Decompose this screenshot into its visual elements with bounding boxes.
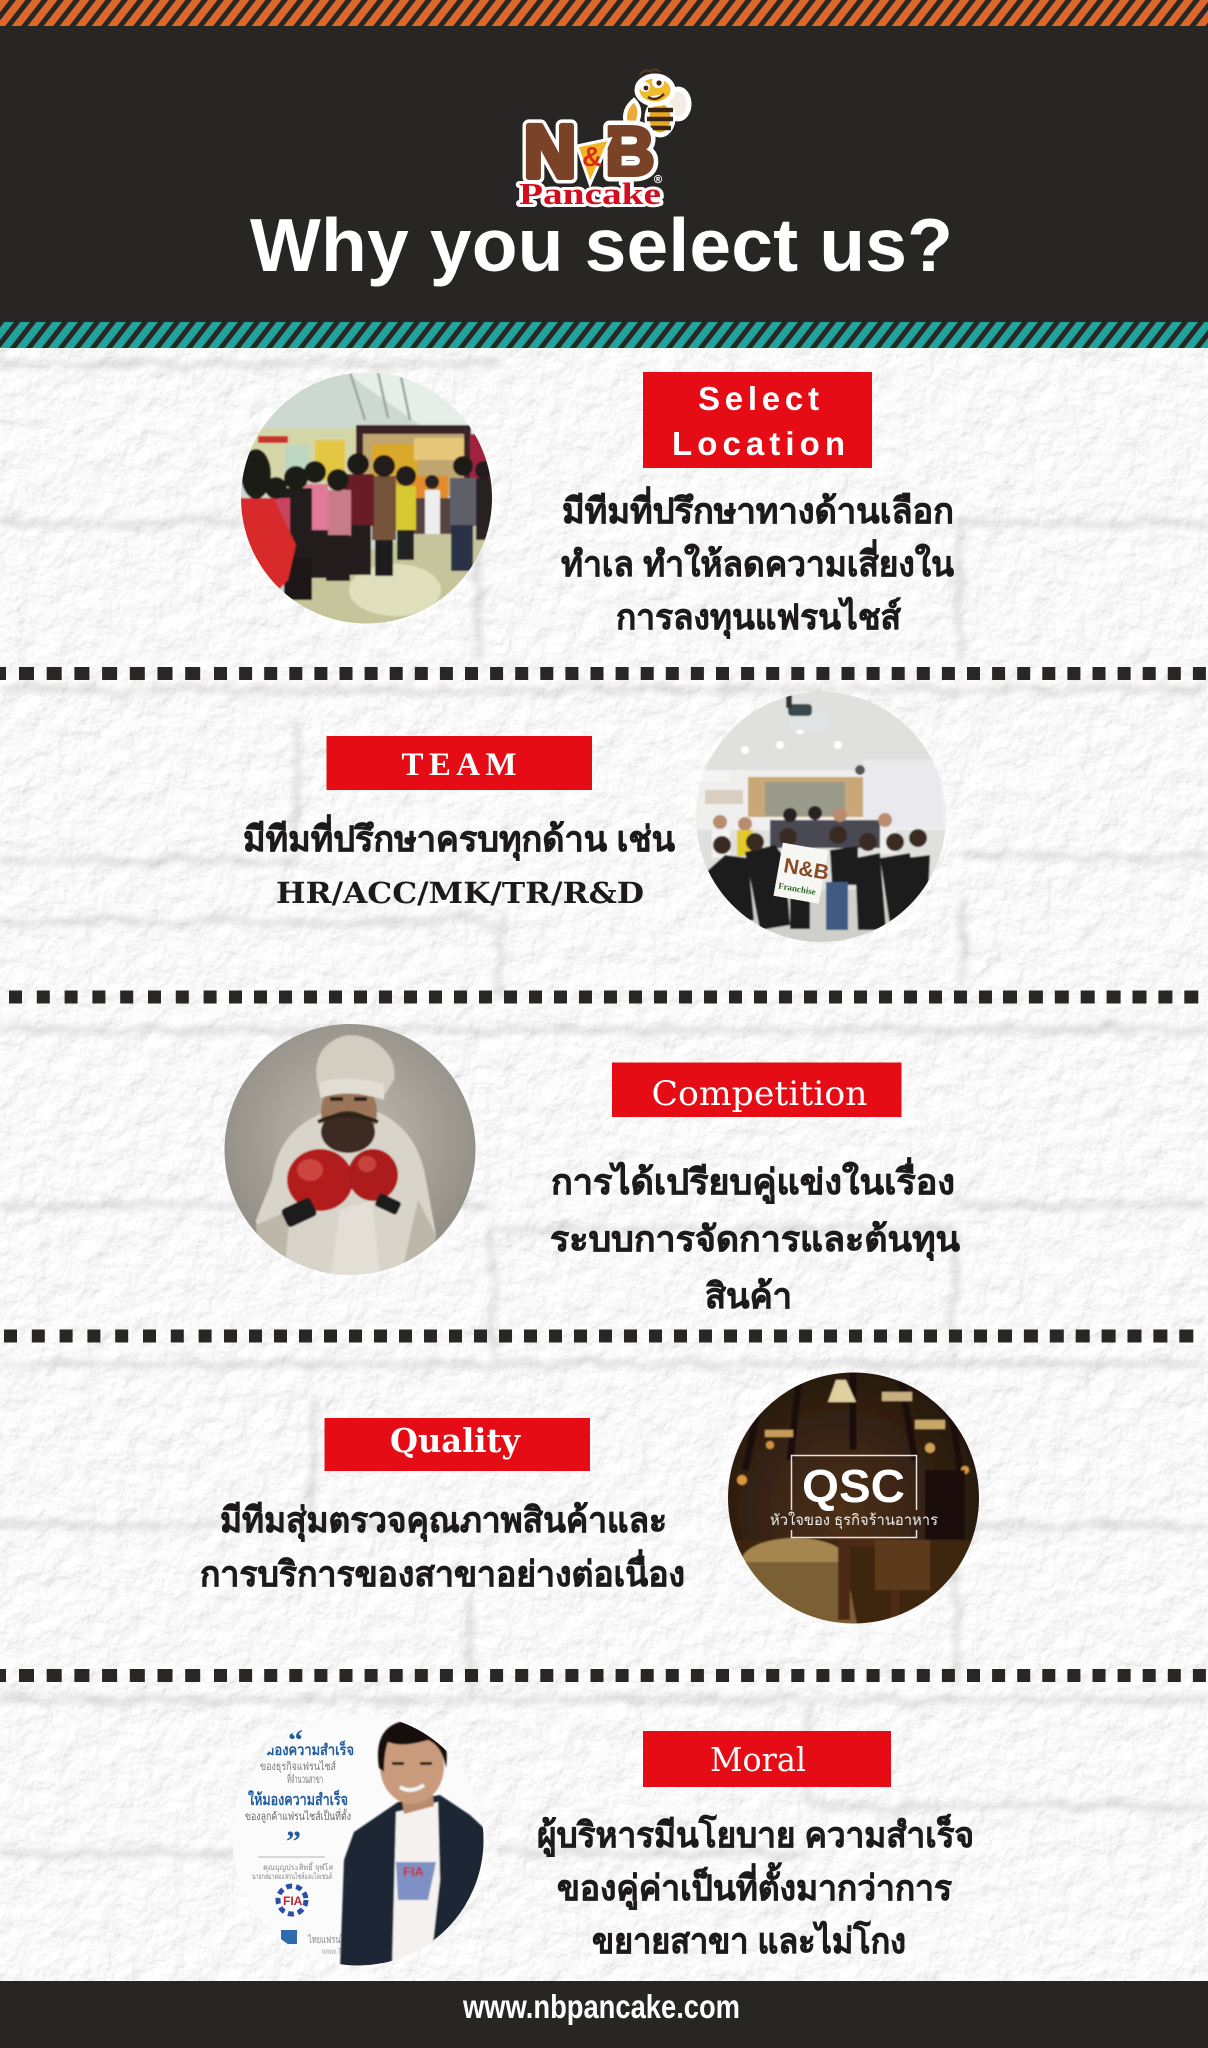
photo: executive portrait with quote: ไทยแฟรนไชส์เซ็นเตอร์ | รวมธุรกิจไทย bbox=[307, 1932, 433, 1946]
text: moral description: ของคู่ค่าเป็นที่ตั้งมากว่าการ bbox=[557, 1862, 952, 1910]
photo: executive portrait with quote bbox=[230, 1712, 486, 1970]
heading: select location: Select bbox=[698, 380, 819, 417]
quote text in the portrait: ” bbox=[286, 1825, 301, 1858]
franchise sign: N&B bbox=[782, 854, 831, 885]
text: quality description: มีทีมสุ่มตรวจคุณภาพสินค้าและ bbox=[220, 1501, 667, 1542]
heading: quality bbox=[324, 1418, 590, 1471]
FIA star logo: FIA bbox=[283, 1894, 303, 1908]
text: select location description: การลงทุนแฟรนไชส์ bbox=[616, 596, 902, 639]
heading: select location: Location bbox=[672, 425, 845, 462]
text: select location description: มีทีมที่ปรึกษาทางด้านเลือก bbox=[562, 486, 954, 531]
text: team description: มีทีมที่ปรึกษาครบทุกด้าน เช่น bbox=[243, 814, 675, 861]
divider 1 bbox=[0, 667, 1208, 680]
photo: executive portrait with quote: www.ThaiFranchiseCenter.com bbox=[321, 1947, 412, 1956]
photo: team group in training room bbox=[695, 690, 947, 950]
panel: quality bbox=[200, 1370, 982, 1630]
gloves bbox=[287, 1149, 353, 1211]
title: Why you select us? bbox=[250, 203, 953, 287]
divider 3 bbox=[4, 1330, 1196, 1342]
chef coat bbox=[256, 1112, 436, 1280]
panel: select location bbox=[240, 372, 954, 639]
panel: moral bbox=[230, 1712, 974, 1970]
panel: competition bbox=[222, 1022, 960, 1316]
photo: restaurant interior with QSC caption: QSC bbox=[802, 1460, 905, 1512]
ampersand: & bbox=[582, 141, 602, 172]
heading: competition: Competition bbox=[652, 1074, 868, 1114]
jacket bbox=[340, 1795, 486, 1970]
text: competition description: การได้เปรียบคู่แข่งในเรื่อง bbox=[551, 1157, 955, 1204]
quote text in the portrait: ให้มองความสำเร็จ bbox=[248, 1788, 348, 1809]
heading: team: TEAM bbox=[402, 747, 516, 783]
heading: select location bbox=[643, 372, 872, 468]
photo: restaurant interior with QSC caption: หัวใจของ ธุรกิจร้านอาหาร bbox=[770, 1511, 938, 1530]
pancake wedge bbox=[577, 139, 610, 184]
neck and head bbox=[400, 1788, 434, 1814]
text: select location description bbox=[561, 486, 954, 639]
N outline: N bbox=[524, 110, 576, 193]
icon: bee mascot bbox=[624, 70, 689, 146]
B: B bbox=[605, 112, 655, 190]
website url: www.nbpancake.com bbox=[462, 1988, 740, 2025]
logo: N&B Pancake with bee bbox=[519, 70, 689, 211]
background: white painted brick wall bbox=[0, 348, 1208, 1982]
text: quality description bbox=[200, 1501, 685, 1594]
shirt bbox=[392, 1802, 440, 1970]
text: team description bbox=[243, 814, 675, 910]
text: quality description: การบริการของสาขาอย่างต่อเนื่อง bbox=[200, 1549, 685, 1594]
header band bbox=[0, 0, 1208, 348]
franchise sign bbox=[773, 843, 833, 905]
N: N bbox=[524, 110, 576, 193]
heading: moral bbox=[643, 1731, 891, 1787]
franchise sign: Franchise bbox=[777, 881, 817, 897]
teal hazard stripes bbox=[0, 322, 1208, 348]
quote text in the portrait: คุณบุญประสิทธิ์ จุฬโส bbox=[263, 1861, 333, 1872]
chef hat bbox=[316, 1035, 395, 1096]
quote text in the portrait: ของธุรกิจแฟรนไชส์ bbox=[260, 1760, 336, 1773]
text: moral description: ผู้บริหารมีนโยบาย ความสำเร็จ bbox=[537, 1813, 974, 1857]
queue of people bbox=[240, 449, 494, 600]
staff in black bbox=[706, 806, 930, 930]
quote text in the portrait: นายกสมาคมแฟรนไชส์และไลเซนส์ bbox=[252, 1871, 332, 1881]
text: moral description bbox=[537, 1813, 974, 1961]
face and beard bbox=[320, 1093, 378, 1126]
text: moral description: ขยายสาขา และไม่โกง bbox=[592, 1920, 906, 1961]
quote text in the portrait: ที่จำนวนสาขา bbox=[287, 1771, 323, 1786]
heading: competition bbox=[612, 1062, 902, 1117]
text: competition description: สินค้า bbox=[705, 1277, 792, 1316]
footer band bbox=[0, 1981, 1208, 2048]
quote text in the portrait bbox=[245, 1724, 354, 1881]
divider 2 bbox=[9, 990, 1199, 1004]
quote text in the portrait: “ bbox=[288, 1724, 303, 1757]
quote text in the portrait: ของลูกค้าแฟรนไชส์เป็นที่ตั้ง bbox=[245, 1808, 351, 1823]
photo: restaurant interior with QSC caption bbox=[726, 1370, 982, 1630]
heading: quality: Quality bbox=[390, 1421, 521, 1460]
projector bbox=[796, 714, 814, 730]
panel: team bbox=[243, 690, 947, 950]
text: team description: HR/ACC/MK/TR/R&D bbox=[276, 876, 644, 910]
photo: chef wearing boxing gloves bbox=[222, 1022, 478, 1280]
text: competition description bbox=[550, 1157, 960, 1316]
photo: customers queueing at the mall kiosk bbox=[240, 372, 500, 630]
heading: team bbox=[326, 736, 592, 790]
text: competition description: ระบบการจัดการและต้นทุน bbox=[550, 1220, 960, 1261]
heading: moral: Moral bbox=[710, 1740, 806, 1779]
FIA star logo bbox=[278, 1886, 306, 1914]
quote text in the portrait: มองความสำเร็จ bbox=[266, 1740, 354, 1759]
Pancake wordmark: Pancake bbox=[519, 176, 661, 211]
orange hazard stripes bbox=[0, 0, 1208, 26]
photo: executive portrait with quote: FIA bbox=[403, 1864, 425, 1879]
B outline: B bbox=[605, 112, 655, 190]
divider 4 bbox=[0, 1669, 1208, 1682]
registered mark: ® bbox=[654, 174, 662, 186]
text: select location description: ทำเล ทำให้ลดความเสี่ยงใน bbox=[561, 539, 954, 584]
